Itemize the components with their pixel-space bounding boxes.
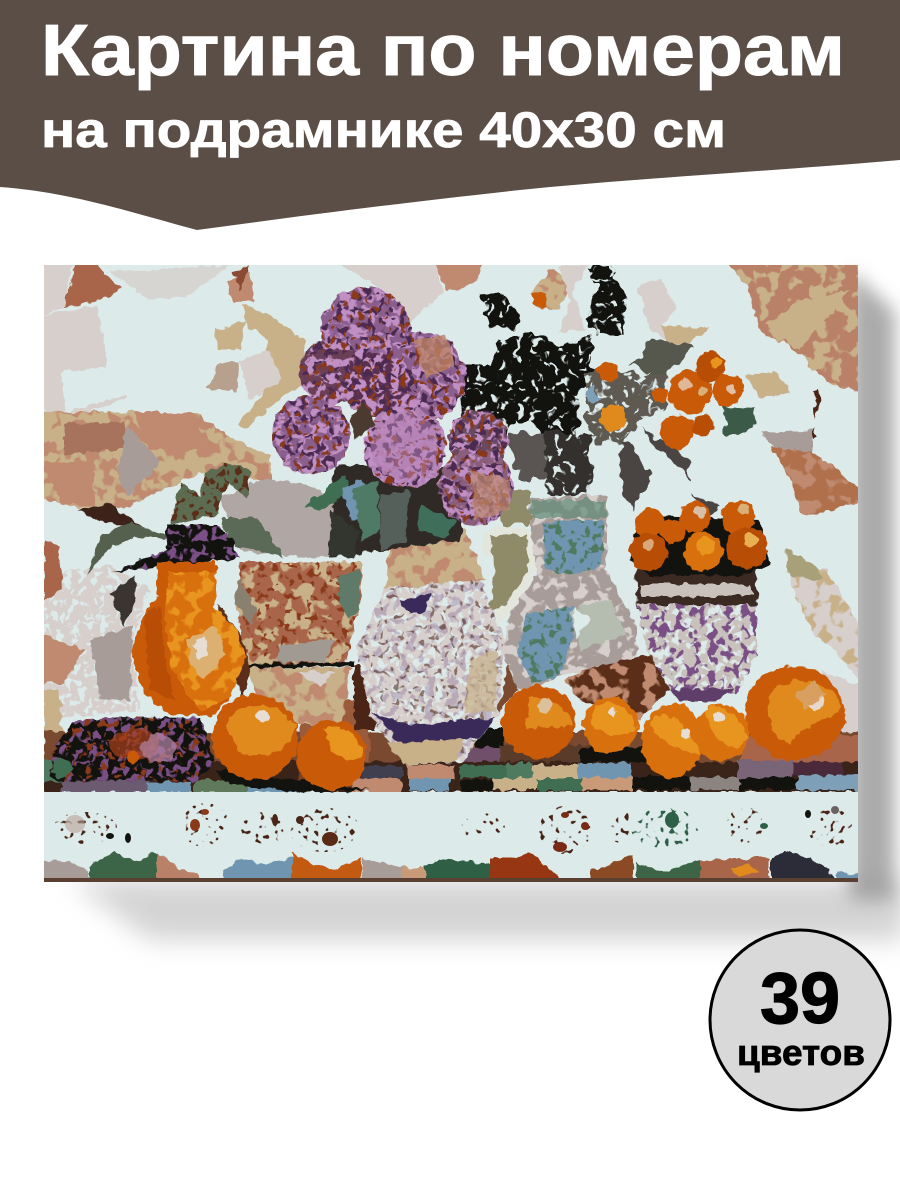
- lace speck patterns: [53, 803, 852, 854]
- vase: blue: [503, 495, 637, 693]
- painting: [40, 260, 865, 884]
- badge: colour count: [710, 930, 890, 1110]
- back table and shelf: [44, 664, 858, 764]
- jug: orange: [131, 562, 257, 717]
- jug: white patterned: [357, 526, 538, 765]
- badge number: 39: [760, 959, 840, 1039]
- orange berries: [598, 352, 744, 449]
- cloth scalloped hem: [44, 851, 858, 878]
- green leaves under flowers: [305, 465, 470, 558]
- bottom fruit cluster behind oranges: [565, 655, 670, 720]
- hydrangea flowers: [272, 287, 514, 525]
- pot: right patterned: [636, 568, 757, 702]
- painted wall patches: [40, 260, 862, 762]
- dark foliage: [460, 265, 820, 525]
- header banner: [0, 0, 900, 230]
- badge label: цветов: [737, 1032, 865, 1073]
- white cloth: [48, 792, 858, 854]
- cloth bottom edge: [44, 878, 858, 882]
- left leaves: [77, 462, 284, 627]
- pot: brown: [234, 562, 362, 725]
- oranges on table: [212, 666, 845, 792]
- canvas shadow: [70, 270, 900, 940]
- subtitle: на подрамнике 40х30 см: [41, 102, 726, 158]
- grapes: [50, 717, 215, 782]
- checkered tablecloth strip: [40, 760, 865, 792]
- title: Картина по номерам: [41, 11, 845, 91]
- oranges in pot: [628, 495, 770, 575]
